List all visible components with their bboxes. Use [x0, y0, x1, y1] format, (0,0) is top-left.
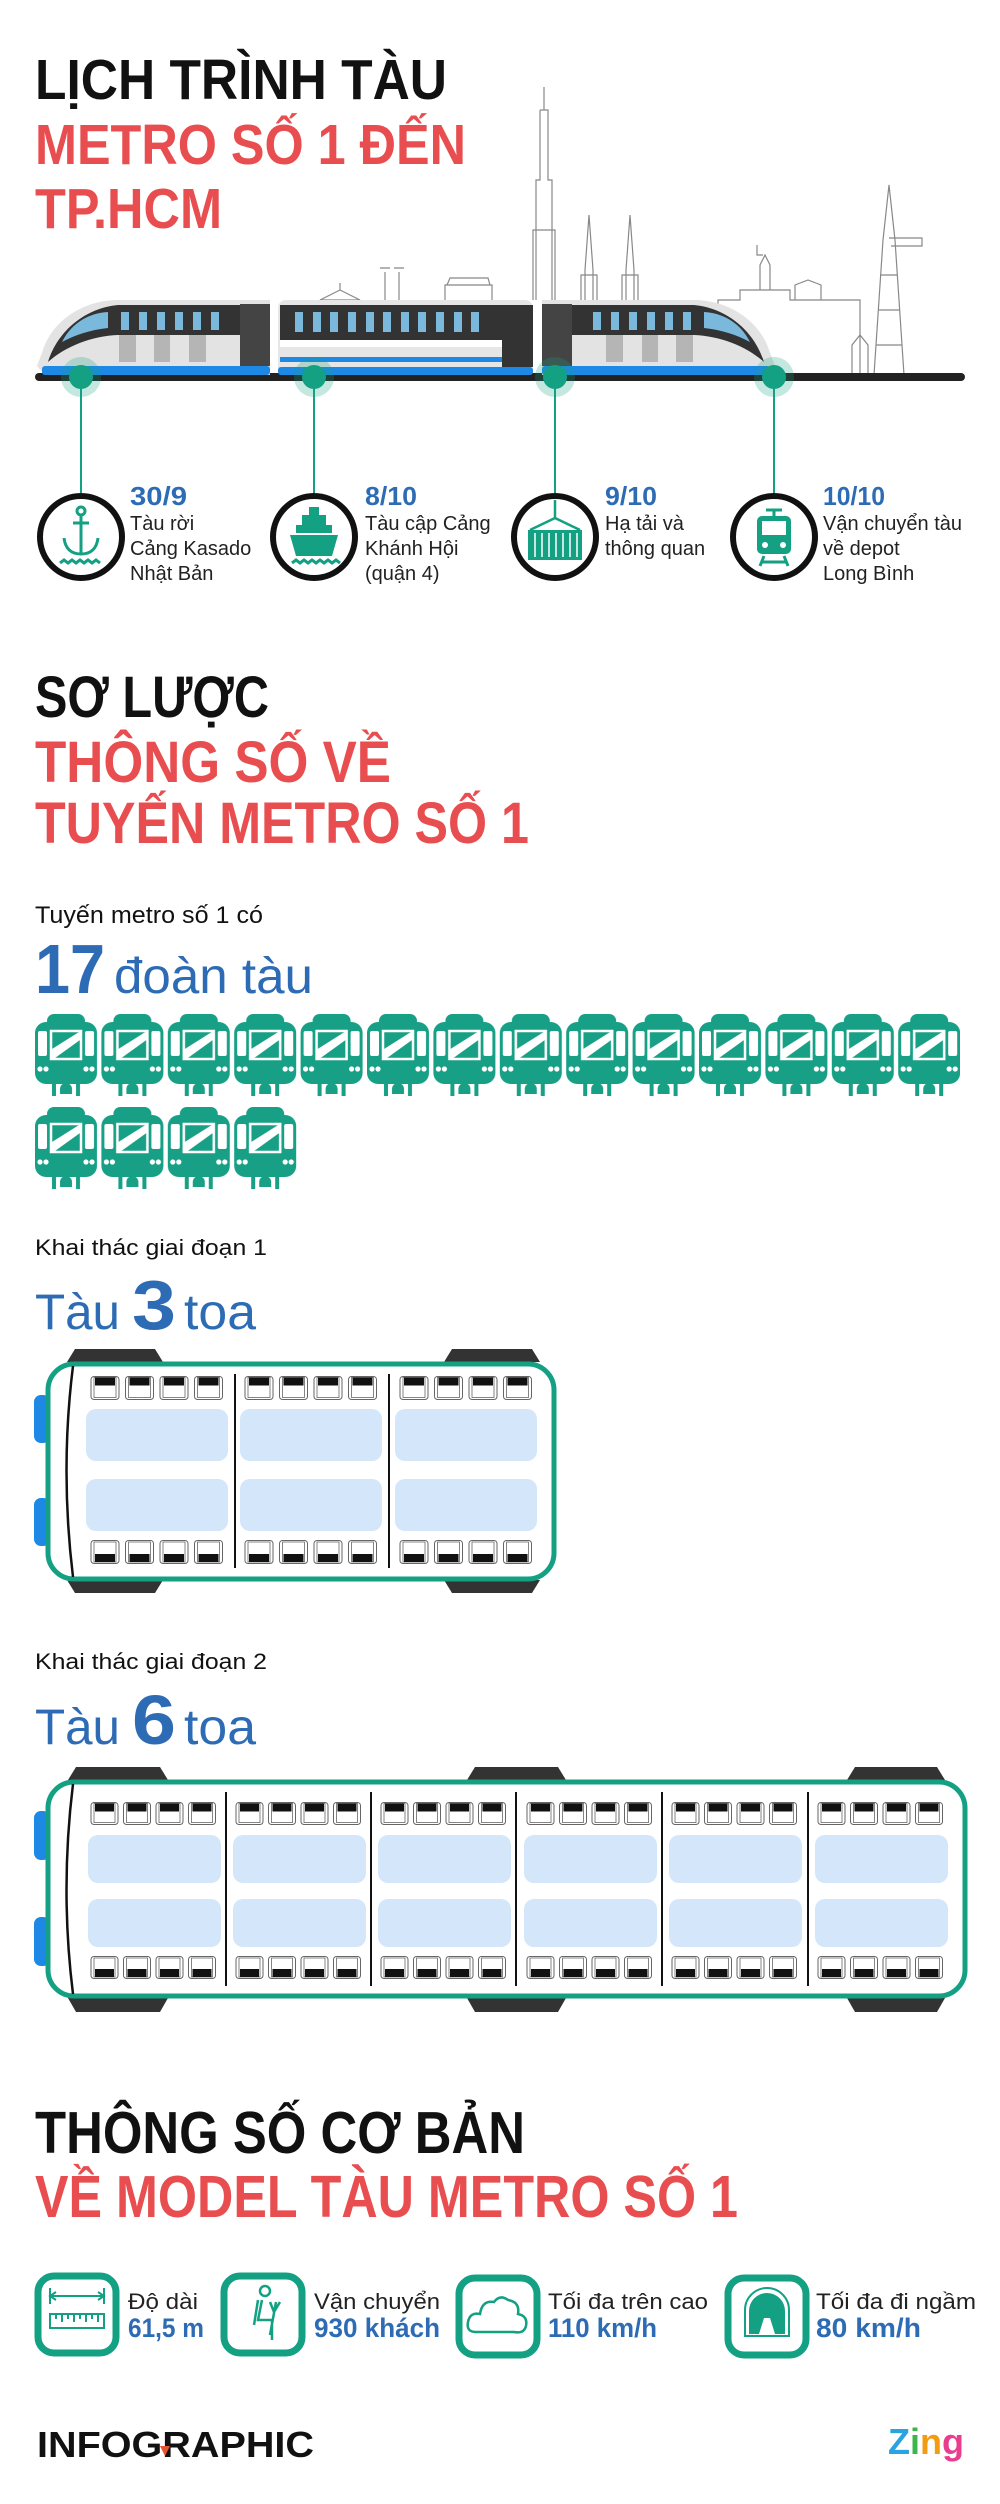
footer: zing logo [888, 2421, 964, 2462]
milestone 4: 10/10: 10/10 [823, 481, 885, 511]
spec: underground speed [728, 2278, 976, 2355]
heading: thông số cơ bản: THÔNG SỐ CƠ BẢN [35, 2099, 525, 2166]
train car 1 [37, 300, 270, 375]
heading: thông số cơ bản: VỀ MODEL TÀU METRO SỐ 1 [35, 2164, 738, 2230]
milestone 2: 8/10: Khánh Hội [365, 538, 458, 560]
milestone 1: 30/9: Cảng Kasado [130, 538, 251, 560]
spec: length: 61,5 m [128, 2313, 204, 2343]
icon: anchor [40, 496, 122, 578]
text: phase 2: 6 [132, 1681, 176, 1759]
icon: seated person [224, 2276, 302, 2353]
milestone 4: 10/10: về depot [823, 538, 900, 560]
spec: capacity: 930 khách [314, 2313, 440, 2343]
milestone 1: 30/9: Tàu rời [130, 513, 194, 535]
milestone 4: 10/10 [733, 481, 962, 585]
icon: train [733, 496, 815, 578]
footer: zing logo: Z [888, 2421, 910, 2462]
heading: sơ lược thông số: TUYẾN METRO SỐ 1 [35, 791, 529, 856]
milestone 3: 9/10: Hạ tải và [605, 513, 685, 535]
diagram: 6-car train [34, 1767, 965, 2012]
spec: length: Độ dài [128, 2289, 198, 2314]
track [35, 373, 965, 381]
text: phase 1: Khai thác giai đoạn 1 [35, 1235, 267, 1260]
heading: thông số cơ bản [35, 2099, 738, 2230]
spec: elevated speed: 110 km/h [548, 2313, 657, 2343]
heading: sơ lược thông số: THÔNG SỐ VỀ [35, 730, 391, 795]
milestone 2: 8/10 [273, 481, 491, 585]
text: 17 đoàn tàu: Tuyến metro số 1 có [35, 902, 263, 929]
diagram: 3-car train [34, 1349, 554, 1593]
skyline illustration [320, 87, 922, 375]
milestone 1: 30/9: Nhật Bản [130, 563, 213, 585]
heading: sơ lược thông số [35, 665, 529, 856]
text: 17 đoàn tàu: đoàn tàu [114, 948, 313, 1004]
milestone 1: 30/9: 30/9 [130, 481, 187, 511]
text: 17 đoàn tàu: 17 [35, 930, 105, 1008]
milestone 3: 9/10: thông quan [605, 538, 705, 560]
title: lịch trình tàu: LỊCH TRÌNH TÀU [35, 48, 447, 112]
title: lịch trình tàu: TP.HCM [35, 177, 222, 241]
icon: ruler [38, 2276, 116, 2353]
spec: capacity: Vận chuyển [314, 2289, 440, 2314]
milestone 2: 8/10: 8/10 [365, 481, 417, 511]
text: phase 1: Tàu [35, 1284, 120, 1340]
milestone 3: 9/10 [514, 481, 705, 578]
footer: zing logo: n [920, 2421, 942, 2462]
icon: ship [273, 496, 355, 578]
train car 2 [278, 300, 533, 375]
text: phase 2 [35, 1649, 267, 1759]
spec: elevated speed [459, 2278, 708, 2355]
footer: infographic logo: INFOGRAPHIC [37, 2424, 314, 2465]
title: lịch trình tàu [35, 48, 466, 241]
text: phase 1: 3 [132, 1266, 176, 1344]
heading: sơ lược thông số: SƠ LƯỢC [35, 665, 269, 730]
icon: tunnel [728, 2278, 806, 2355]
icon: container crane [514, 496, 596, 578]
train illustration [37, 300, 775, 375]
milestone 4: 10/10: Vận chuyển tàu [823, 513, 962, 535]
spec: elevated speed: Tối đa trên cao [548, 2289, 708, 2314]
text: phase 1: toa [184, 1284, 256, 1340]
text: 17 đoàn tàu [35, 902, 313, 1008]
spec: length [38, 2276, 204, 2353]
text: phase 2: Khai thác giai đoạn 2 [35, 1649, 267, 1674]
milestone 4: 10/10: Long Bình [823, 563, 914, 585]
spec: capacity [224, 2276, 440, 2353]
icons: 17 trains [35, 1014, 960, 1192]
footer: zing logo: i [910, 2421, 920, 2462]
text: phase 2: toa [184, 1699, 256, 1755]
milestone 2: 8/10: Tàu cập Cảng [365, 513, 491, 535]
icon: cloud [459, 2278, 537, 2355]
milestone 3: 9/10: 9/10 [605, 481, 657, 511]
spec: underground speed: 80 km/h [816, 2313, 921, 2343]
milestone 2: 8/10: (quận 4) [365, 563, 440, 585]
title: lịch trình tàu: METRO SỐ 1 ĐẾN [35, 112, 466, 177]
train car 3 [542, 300, 775, 375]
timeline connectors [61, 357, 794, 494]
milestone 1: 30/9 [40, 481, 251, 585]
text: phase 1 [35, 1235, 267, 1344]
spec: underground speed: Tối đa đi ngầm [816, 2289, 976, 2314]
text: phase 2: Tàu [35, 1699, 120, 1755]
footer: zing logo: g [942, 2421, 964, 2462]
